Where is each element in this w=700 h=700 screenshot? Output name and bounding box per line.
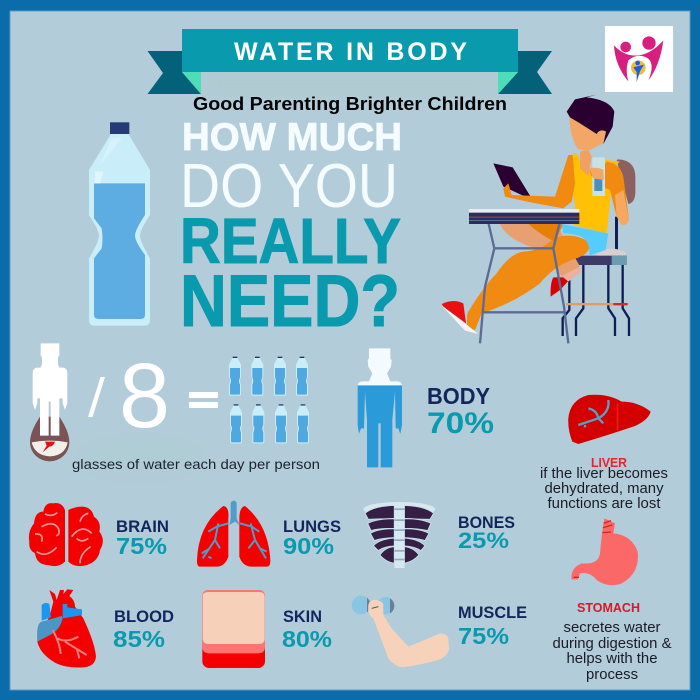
text: stomach: helps with the (566, 650, 658, 667)
hair (567, 95, 614, 144)
headline: REALLY (180, 205, 401, 277)
illustration: woman with tablet at table (441, 95, 635, 343)
stat: bones: 25% (458, 528, 509, 553)
divide and equals signs: 8 (119, 345, 170, 447)
stat: lungs (283, 517, 341, 559)
stat: lungs: 90% (283, 533, 334, 559)
text: liver: if the liver becomes (540, 465, 668, 482)
stat: skin (282, 607, 332, 652)
stat: bones: BONES (458, 513, 515, 532)
icon: person on scale (30, 343, 69, 461)
text: liver: functions are lost (548, 495, 661, 512)
left arm and hand (503, 155, 575, 208)
caption: glasses per day: glasses of water each day per person (72, 456, 320, 472)
stat: brain (116, 517, 169, 559)
icon: skin layers (202, 590, 265, 668)
icon: large water bottle (89, 122, 150, 326)
headline: DO YOU (180, 152, 398, 221)
person (33, 343, 67, 436)
stat: blood: 85% (113, 626, 165, 652)
text: stomach: secretes water (564, 619, 660, 636)
title banner (148, 29, 552, 94)
far leg (500, 224, 580, 278)
text: liver: dehydrated, many (544, 480, 664, 497)
stat: lungs: LUNGS (283, 517, 341, 536)
stat: blood (113, 607, 174, 652)
divide and equals signs (88, 345, 218, 447)
icon: arm with dumbbell (352, 596, 449, 667)
text: stomach (552, 600, 672, 683)
stat: blood: BLOOD (114, 607, 174, 626)
stat: skin: SKIN (283, 607, 322, 626)
text: liver: LIVER (591, 455, 628, 470)
stat: body: 70% (427, 407, 494, 440)
text: stomach: process (586, 666, 638, 683)
icon: bones (363, 502, 435, 568)
hand (589, 168, 604, 180)
title banner: WATER IN BODY (234, 38, 467, 66)
stat: brain: 75% (116, 533, 167, 559)
headline: NEED? (180, 261, 400, 342)
shorts (562, 224, 608, 255)
stat: muscle: 75% (458, 623, 509, 649)
icon: liver (568, 395, 651, 444)
near leg (467, 236, 589, 330)
right arm (589, 162, 629, 225)
stat: brain: BRAIN (116, 517, 169, 536)
stat: body (427, 383, 494, 440)
logo (605, 26, 673, 92)
shoe (442, 301, 466, 323)
chair (563, 159, 635, 336)
stat: muscle: MUSCLE (458, 603, 527, 622)
glass (592, 157, 605, 196)
scale (30, 417, 69, 461)
subtitle: Good Parenting Brighter Children (193, 93, 507, 114)
icon: heart (37, 589, 96, 667)
torso (571, 153, 620, 233)
icon: lungs (197, 501, 270, 567)
text: liver (540, 455, 668, 512)
tablet (493, 163, 533, 200)
stat: muscle (458, 603, 527, 649)
icon: brain (29, 503, 103, 566)
headline: HOW MUCH (182, 116, 402, 159)
stat: bones (458, 513, 515, 553)
icon: stomach (571, 518, 638, 585)
headline (180, 116, 402, 342)
stat: skin: 80% (282, 626, 332, 652)
neck and face (569, 117, 602, 152)
text: stomach: STOMACH (577, 600, 640, 615)
icon: eight small bottles (229, 357, 309, 443)
stat: body: BODY (427, 383, 490, 409)
icon: body figure (358, 348, 402, 467)
table (480, 224, 568, 343)
text: stomach: during digestion & (552, 635, 672, 652)
